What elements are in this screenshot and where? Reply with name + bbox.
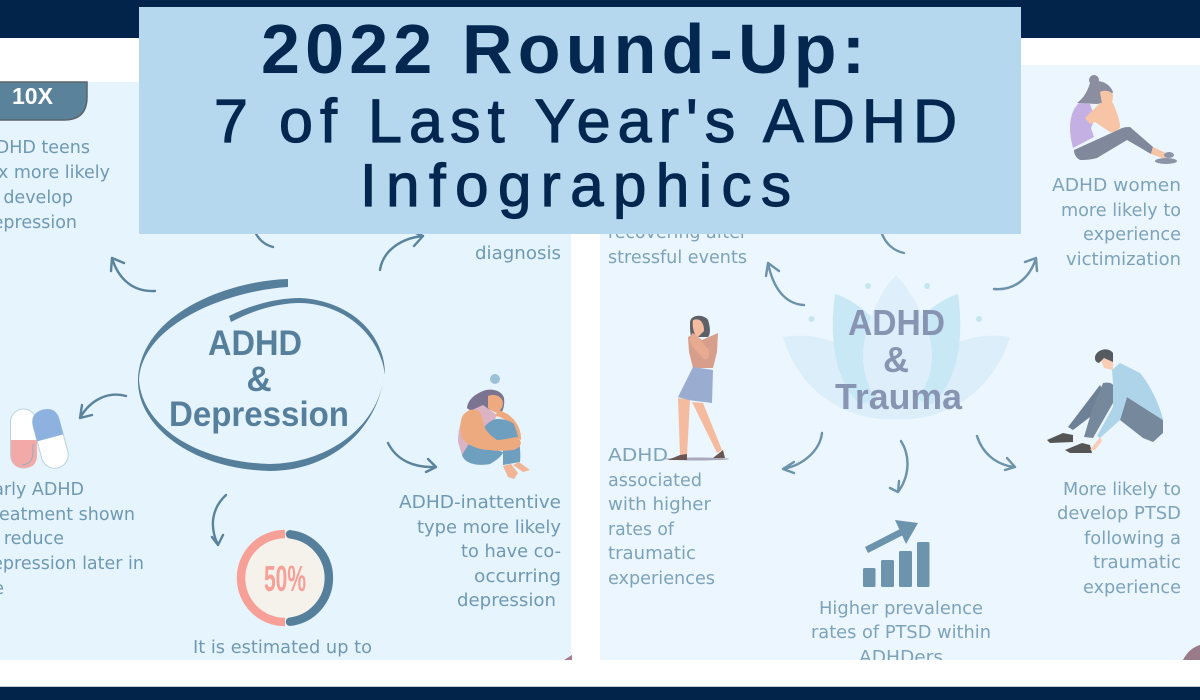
text: ADHD associated with trauma: ADHD (608, 446, 668, 466)
text: higher prevalence of PTSD: Higher prevalence (819, 599, 983, 619)
text: inattentive type: occurring (474, 567, 561, 587)
text: more likely to develop PTSD: develop PTSD (1057, 504, 1181, 524)
text: ADHD women victimization (1052, 176, 1181, 270)
arrow: to stressful events (766, 263, 804, 305)
top band (0, 0, 1200, 38)
illustration: woman hugging knees (458, 374, 530, 479)
text: more likely to develop PTSD: traumatic (1093, 553, 1181, 573)
title: 7 of Last Year's ADHD (214, 87, 957, 155)
arrow: to pills (80, 395, 126, 418)
text: ADHD associated with trauma (608, 446, 715, 589)
text: diagnosis: diagnosis (475, 244, 561, 264)
panel: ADHD and depression (0, 82, 572, 660)
text: higher prevalence of PTSD: rates of PTSD within (811, 623, 991, 643)
panel: ADHD and trauma (600, 65, 1200, 668)
icon: lotus (783, 275, 1010, 419)
text: recovering after stressful events: stressful events (608, 248, 747, 268)
chart: 50 percent donut: 50% (264, 558, 306, 599)
heading: ADHD and Depression (169, 324, 349, 434)
arrow: to inattentive woman (388, 443, 436, 472)
text: more likely to develop PTSD: experience (1083, 578, 1181, 598)
icon: pills (10, 406, 71, 471)
text: recovering after stressful events: recovering after (608, 223, 748, 243)
arrow: to standing woman (783, 433, 822, 473)
heading: ADHD and Trauma: & (883, 339, 909, 380)
heading: ADHD and Depression: Depression (169, 395, 349, 434)
heading: ADHD and Depression: ADHD (208, 324, 302, 363)
text: inattentive type: to have co- (461, 542, 561, 562)
text: ADHD women victimization: victimization (1066, 250, 1181, 270)
icon: rising bar chart (863, 520, 930, 587)
heading: ADHD and Trauma (835, 302, 963, 417)
chart: 50 percent donut (241, 534, 329, 622)
text: ADHD associated with trauma: experiences (608, 569, 715, 589)
text: ADHD associated with trauma: with higher (608, 495, 712, 515)
text: higher prevalence of PTSD (811, 599, 991, 668)
central hand-drawn ellipse (138, 279, 385, 471)
text: ADHD women victimization: experience (1083, 225, 1181, 245)
illustration: seated man looking down (1047, 349, 1163, 453)
text: recovering after stressful events (608, 223, 748, 268)
text: inattentive type: depression (457, 591, 556, 611)
arrow: to diagnosis (380, 231, 423, 270)
bottom margin and band (0, 660, 1200, 700)
heading: ADHD and Trauma: ADHD (848, 302, 945, 343)
text: more likely to develop PTSD: More likely to (1063, 480, 1181, 500)
arrow: to teens (111, 258, 155, 291)
text: estimated up to: It is estimated up to (193, 638, 372, 658)
text: higher prevalence of PTSD: ADHDers (859, 648, 943, 668)
text: ADHD associated with trauma: associated (608, 471, 702, 491)
10X badge (0, 82, 87, 120)
text: more likely to develop PTSD (1057, 480, 1181, 598)
arrow: to chart (890, 441, 907, 492)
text: inattentive type: ADHD-inattentive (399, 493, 561, 513)
arrow: to seated man (977, 436, 1015, 470)
heading: ADHD and Trauma: Trauma (835, 376, 963, 417)
text: ADHD associated with trauma: traumatic (608, 544, 696, 564)
text: inattentive type (399, 493, 561, 611)
text: more likely to develop PTSD: following a (1084, 529, 1181, 549)
text: ADHD women victimization: more likely to (1061, 201, 1181, 221)
10X badge: 10X (12, 83, 54, 109)
arrow: top centre (882, 234, 904, 253)
text: ADHD associated with trauma: rates of (608, 520, 675, 540)
illustration: woman sitting, head in hand (1070, 75, 1177, 164)
text: inattentive type: type more likely (417, 518, 561, 538)
text: ADHD women victimization: ADHD women (1052, 176, 1181, 196)
arrow: to women victimization (994, 258, 1037, 289)
title: 2022 Round-Up: (261, 10, 865, 88)
arrow: top centre (255, 232, 273, 247)
title: Infographics (360, 152, 791, 219)
title (139, 7, 1021, 234)
heading: ADHD and Depression: & (246, 360, 272, 399)
illustration: standing woman covering face (665, 316, 729, 460)
arrow: to 50 percent (212, 495, 226, 545)
